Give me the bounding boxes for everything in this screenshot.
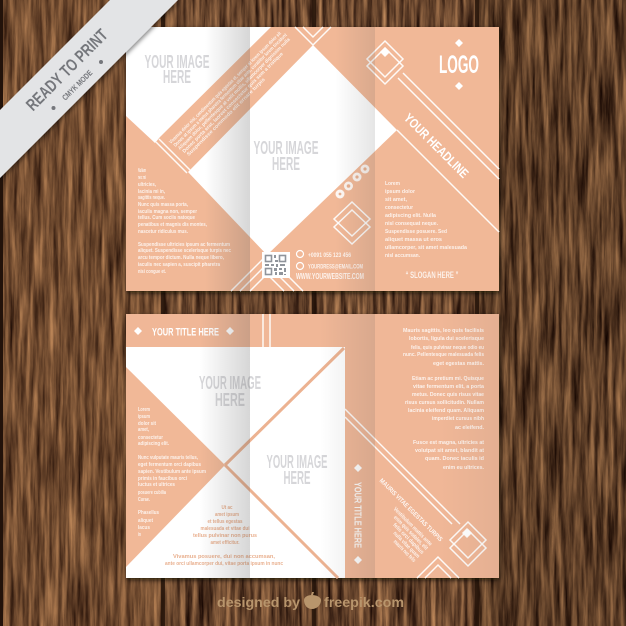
vertical title: YOUR TITLE HERE [352,482,364,548]
text block: panel 3: Lorem [385,181,400,187]
rotated text block, right panel: felis orci dapibus [391,522,425,556]
text block: triangle: amet, [138,427,149,433]
text block: panel 3: nisl consequat neque. [385,221,438,227]
bottom chevrons, right panel [417,557,459,578]
text block: peach on white: tellus pulvinar non purus [193,533,257,539]
headline: YOUR HEADLINE [401,110,472,181]
text block: panel 1: lacinia mi in, [138,189,165,195]
contact details: +0091 055 123 456 [308,253,352,259]
brochure base sheet [126,27,499,291]
text block: panel 3: nisl accumsan. [385,253,420,259]
rotated title, right panel: MAURIS VITAE EGESTAS TURPIS [378,477,444,544]
text block: triangle: adipiscing elit. [138,441,169,447]
text block: peach on white: ante orci ullamcorper dui, vitae porta ipsum in nunc [165,561,283,567]
text block: panel 1: Suspendisse ultricies ipsum ac fermentum [138,242,230,248]
panel: diagonal band text: Vivamus dolor nisi, condimentum quis egestas et, semper at lorem ipsum dolor sit [168,31,283,145]
text block: panel 1: sagittis neque. [138,195,165,201]
contact details: YOURDRESS@EMAIL.COM [308,264,363,270]
text block: panel 3: adipiscing elit. Nulla [385,213,437,219]
text block: triangle: Nunc vulputate mauris tellus, [138,455,198,461]
text block: right panel: volutpat sit amet, blandit at [415,448,484,454]
text block: triangle: aliquet [138,518,153,524]
title bar text: YOUR TITLE HERE [152,326,219,338]
double diamond outline, panel 2 [334,202,370,244]
text block: triangle: eget fermentum orci dapibus [138,462,201,468]
thin peach dividing lines [225,348,344,578]
text block: triangle: posuere cubilia [138,490,167,496]
text block: right panel: imperdiet cursus nibh [432,416,485,422]
ribbon: ready to print [0,0,178,178]
panel: diagonal band text: Donec at ipsum a metus pharetra fermentum vitae ante, curabitur lorem tincidunt [173,32,289,148]
top vertical lines [263,314,270,347]
text block: triangle: Curae. [138,497,150,503]
slogan: “ SLOGAN HERE ” [406,270,458,280]
text block: panel 3: aliquet massa ut eros [385,237,442,243]
diagonal lines, right panel [345,409,460,524]
text block: panel 3: sit amet, [385,197,407,203]
text block: peach on white: amet efficitur. [210,540,240,546]
square logo emblem, panel 3 [367,41,403,84]
text block: panel 1: iaculis magna non, semper [138,209,198,215]
text block: right panel [403,328,485,471]
panel: diagonal band text: Aliquam dolor, pellentesque at velit mollis, ullamcorper dignissim nulla [177,37,292,151]
text block: panel 1: aliquet. Suspendisse scelerisque turpis nec [138,248,231,254]
heading: your image here, panel 1: HERE [163,67,191,87]
text block: right panel: quam. Donec iaculis id [425,456,485,462]
text block: triangle: Lorem [138,407,150,413]
heading: your image here, panel 2: HERE [272,154,300,174]
heading: your image here, panel 1 [144,52,210,87]
text block: triangle: sapien. Vestibulum ante ipsum [138,469,206,475]
text block: right panel: Fusce est magna, ultricies at [413,440,484,446]
freepik credit: designed by [217,594,300,610]
text block: panel 3: Suspendisse posuere. Sed [385,229,447,235]
freepik credit [217,592,404,610]
text block: right panel: vitae fermentum elit, a porta [413,384,485,390]
text block: right panel: ac eleifend. [455,425,484,431]
rotated text block, right panel: nulla vitae quam [392,531,421,560]
heading: your image here, centre [266,452,328,488]
text block: right panel: nunc. Pellentesque malesuada felis [403,352,484,358]
text block: right panel: lacinia eleifend quam. Aliquam [408,408,484,414]
text block: right panel: Etiam ac pretium mi. Quisque [412,376,484,382]
rotated text block, right panel: Vestibulum mattis ante [392,506,433,547]
brochure base sheet [126,314,499,578]
text block: panel 3 [385,181,468,259]
ribbon dots [52,60,103,110]
text block: triangle: in [138,532,141,538]
QR code [262,252,290,278]
long diagonal lines, panel 3 [397,73,499,232]
decorative top chevrons [295,27,331,45]
bottom brochure: inside spread [126,314,499,578]
text block: peach on white: et tellus egestas [208,519,242,525]
heading: your image here, centre: HERE [284,468,310,488]
peach triangle, left [126,367,225,567]
logo: LOGO [439,51,479,79]
rotated text block, right panel: enim quis sodales, elit [392,515,429,552]
text block: panel 1: nisi congue et. [138,269,166,275]
text block: panel 1: nascetur ridiculus mus. [138,229,188,235]
double diamond emblem, right panel [450,522,486,566]
diagonal stripes at band end [156,139,190,173]
image placeholder: upper left white area [126,27,271,143]
panel: diagonal band text: Suspendisse commodo elit ornare turpis [186,77,267,158]
text block: panel 3: ullamcorper, sit amet malesuada [385,245,468,251]
panel: diagonal band text: Donec porta erat, laoreet consectetur quis sem a tristique [182,51,285,155]
text block: peach on white: Ut ac [222,505,232,511]
text block: right panel: lobortis, ligula dui scelerisque [409,336,484,342]
text block: panel 1 [138,168,231,275]
text block: peach on white [165,505,283,567]
rotated text block, right panel: mauris nec felis [392,539,416,564]
text block: triangle [138,407,206,538]
decorative bottom chevrons [231,255,303,291]
heading: your image here, centre: YOUR IMAGE [266,452,328,472]
text block: right panel: Mauris sagittis, leo quis facilisis [403,328,484,334]
text block: right panel: eget egestas mattis. [433,361,484,367]
text block: triangle: ipsum [138,414,150,420]
heading: your image here, left: YOUR IMAGE [199,373,261,393]
text block: panel 1: nec mi [138,175,146,181]
image placeholder: white area [126,347,345,578]
text block: triangle: luctus et ultrices [138,482,175,488]
text block: peach on white: amet ipsum [215,512,239,518]
text block: triangle: lacus [138,525,150,531]
text block: triangle: dolor sit [138,421,156,427]
text block: panel 1: Nunc quis massa porta, [138,202,188,208]
top brochure: outside spread [126,27,499,291]
text block: right panel: metus. Donec quis risus vitae [412,392,484,398]
heading: your image here, left: HERE [215,390,245,410]
rotated text block, right panel [375,506,433,564]
text block: panel 3: ipsum dolor [385,189,416,195]
icon: freepik mascot [304,592,321,609]
text block: right panel: enim eu ultrices. [443,465,484,471]
heading: your image here, panel 2 [254,138,318,174]
text block: right panel: risus cursus sollicitudin. Nullam [405,400,484,406]
ribbon heading: READY TO PRINT [22,25,112,115]
ribbon subheading: CMYK MODE [60,68,95,102]
image placeholder: central white diamond [188,45,397,255]
text block: panel 1: Nullam [138,168,146,174]
text block: panel 1: penatibus et magnis dis montes, [138,222,207,228]
social icons [336,164,370,198]
text block: panel 1: tellus. Cum sociis natoque [138,215,195,221]
text block: panel 1: ultricies, [138,182,156,188]
fold shading, bottom brochure [200,314,499,578]
heading: your image here, panel 2: YOUR IMAGE [254,138,318,158]
text block: peach on white: Vivamus posuere, dui non accumsan, [173,554,275,560]
fold shading, top brochure [205,27,375,291]
text block: peach on white: malesuada et vitae dui [200,526,250,532]
logo [439,39,479,90]
freepik credit: freepik.com [324,594,404,610]
contact details [296,250,364,281]
heading: your image here, left [199,373,261,410]
text block: triangle: consectetur [138,435,164,441]
text block: right panel: felis, quis pulvinar neque odio eu [411,345,484,351]
text block: panel 1: arcu tempor dictum. Nulla neque libero, [138,255,224,261]
text block: triangle: Phasellus [138,510,159,516]
text block: panel 3: consectetur [385,205,414,211]
contact details: WWW.YOURWEBSITE.COM [296,272,364,281]
text block: triangle: primis in faucibus orci [138,476,187,482]
heading: your image here, panel 1: YOUR IMAGE [144,52,210,72]
text block: panel 1: iaculis nec sapien a, suscipit pharetra [138,262,221,268]
